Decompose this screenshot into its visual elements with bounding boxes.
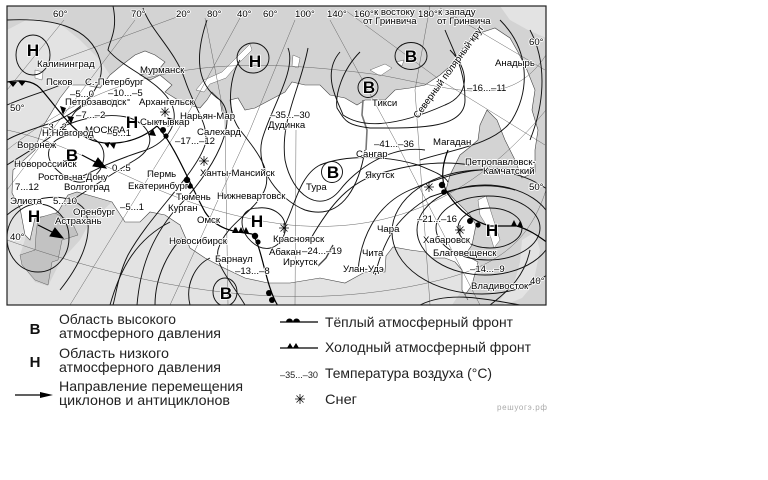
map labels: –35...–30	[270, 110, 310, 121]
map labels: 40°	[530, 276, 545, 287]
map labels: Архангельск	[139, 97, 195, 108]
map labels: к западу	[438, 7, 476, 18]
Sakhalin	[478, 196, 500, 248]
map labels: Нарьян-Мар	[180, 111, 235, 122]
map labels: от Гринвича	[437, 16, 491, 27]
map labels: –24...–19	[302, 246, 342, 257]
legend cold front: Холодный атмосферный фронт	[325, 339, 532, 355]
map labels: 180°	[418, 9, 438, 20]
map labels: Элиста	[10, 196, 43, 207]
map labels: Сыктывкар	[140, 117, 190, 128]
pressure letters: В	[363, 78, 375, 97]
map labels: Сангар	[356, 149, 388, 160]
map labels: Салехард	[197, 127, 241, 138]
legend low pressure	[30, 345, 221, 375]
map labels: Калининград	[37, 59, 95, 70]
Novaya Zemlya	[196, 44, 252, 92]
map labels: 160°	[354, 9, 374, 20]
panel: weather map	[7, 6, 572, 306]
map labels: Екатеринбург	[128, 181, 189, 192]
Russia territory	[12, 28, 538, 300]
map labels: Абакан	[269, 247, 301, 258]
map labels: Новосибирск	[169, 236, 228, 247]
pressure letters: Н	[486, 221, 498, 240]
map labels: Петропавловск-	[465, 157, 536, 168]
watermark: решуогэ.рф	[497, 403, 547, 412]
legend high pressure	[30, 311, 221, 341]
map labels: 70°	[131, 9, 146, 20]
legend warm front: Тёплый атмосферный фронт	[325, 314, 514, 330]
map labels: –5...0	[70, 89, 94, 100]
map labels: Красноярск	[273, 234, 325, 245]
map labels: –5...1	[107, 128, 131, 139]
map labels: 50°	[10, 103, 25, 114]
map labels: 60°	[529, 37, 544, 48]
pressure letters: В	[220, 284, 232, 303]
map labels: –41...–36	[374, 139, 414, 150]
map labels: Омск	[197, 215, 221, 226]
isobars	[7, 6, 572, 306]
map labels: Чара	[377, 224, 400, 235]
map labels: 140°	[327, 9, 347, 20]
map labels: Тикси	[372, 98, 397, 109]
map labels: Нижневартовск	[217, 191, 286, 202]
graticule	[7, 6, 546, 305]
map labels: –7...–2	[76, 110, 105, 121]
map labels: 50°	[529, 182, 544, 193]
map labels: Дудинка	[268, 120, 306, 131]
pressure letters: В	[66, 146, 78, 165]
map labels: Барнаул	[215, 254, 253, 265]
map labels: 7...12	[15, 182, 39, 193]
legend snow: Снег	[325, 391, 357, 407]
map labels: Северный полярный круг	[412, 23, 487, 121]
map labels: –17...–12	[175, 136, 215, 147]
map labels	[10, 7, 545, 292]
map labels: Воронеж	[17, 140, 57, 151]
map labels: 80°	[207, 9, 222, 20]
map labels: –13...–8	[235, 266, 270, 277]
legend high pressure: атмосферного давления	[59, 325, 221, 341]
map labels: Тюмень	[176, 192, 211, 203]
map labels: 60°	[263, 9, 278, 20]
map labels: к востоку	[374, 7, 415, 18]
legend temperature: Температура воздуха (°С)	[325, 365, 492, 381]
legend high pressure: В	[30, 321, 41, 338]
legend: left column	[15, 311, 243, 408]
map labels: МОСКВА	[85, 125, 126, 136]
map labels: Камчатский	[483, 166, 535, 177]
map labels: С.-Петербург	[85, 77, 144, 88]
map labels: Хабаровск	[423, 235, 471, 246]
map labels: Улан-Удэ	[343, 264, 384, 275]
map labels: Якутск	[365, 170, 395, 181]
pressure letters: Н	[126, 113, 138, 132]
legend high pressure: Область высокого	[59, 311, 176, 327]
movement arrows	[38, 118, 181, 238]
legend arrow: циклонов и антициклонов	[59, 392, 230, 408]
legend temperature: –35...–30	[280, 370, 318, 380]
west front line	[7, 81, 278, 306]
map labels: 100°	[295, 9, 315, 20]
map labels: Курган	[168, 203, 198, 214]
pressure letters: В	[405, 47, 417, 66]
map labels: Волгоград	[64, 182, 110, 193]
map labels: Новороссийск	[14, 159, 77, 170]
map labels: Чита	[362, 248, 384, 259]
snow symbols	[160, 107, 465, 235]
legend: right column	[280, 314, 532, 407]
map labels: Астрахань	[55, 216, 102, 227]
map labels: Ханты-Мансийск	[200, 168, 276, 179]
pressure letters: Н	[28, 207, 40, 226]
map labels: Магадан	[433, 137, 471, 148]
map labels: от Гринвича	[363, 16, 417, 27]
map labels: –16...–11	[467, 83, 506, 94]
Caspian Sea	[20, 213, 78, 285]
map labels: Петрозаводск	[65, 97, 127, 108]
legend low pressure: Н	[30, 354, 40, 371]
pressure letters: Н	[249, 52, 261, 71]
map labels: Владивосток	[471, 281, 529, 292]
map labels: Мурманск	[140, 65, 185, 76]
map labels: Псков	[46, 77, 72, 88]
map labels: 5...10	[53, 196, 77, 207]
pressure letters: Н	[251, 212, 263, 231]
map labels: Пермь	[147, 169, 176, 180]
east front line	[439, 150, 548, 243]
map labels: Благовещенск	[433, 248, 497, 259]
pressure letters	[27, 41, 498, 303]
map labels: Оренбург	[73, 207, 116, 218]
pressure letters: Н	[27, 41, 39, 60]
Lena river and Baikal	[362, 100, 367, 150]
map labels: Ростов-на-Дону	[38, 172, 108, 183]
map labels: 40°	[10, 232, 25, 243]
pressure letters: В	[327, 163, 339, 182]
map labels: –3...2	[43, 122, 67, 133]
map labels: Тура	[306, 182, 327, 193]
map labels: 20°	[176, 9, 191, 20]
legend low pressure: атмосферного давления	[59, 359, 221, 375]
map labels: 40°	[237, 9, 252, 20]
map labels: 60°	[53, 9, 68, 20]
map labels: Анадырь	[495, 58, 535, 69]
legend snow	[295, 391, 357, 407]
map labels: –21...–16	[417, 214, 457, 225]
map labels: –10...–5	[108, 88, 143, 99]
legend low pressure: Область низкого	[59, 345, 169, 361]
legend arrow	[15, 378, 243, 408]
map labels: –14...–9	[470, 264, 505, 275]
map labels: Иркутск	[283, 257, 318, 268]
map labels: 0...5	[112, 163, 131, 174]
map labels: –5...1	[120, 202, 144, 213]
map labels: Н.Новгород	[42, 128, 94, 139]
legend arrow: Направление перемещения	[59, 378, 243, 394]
